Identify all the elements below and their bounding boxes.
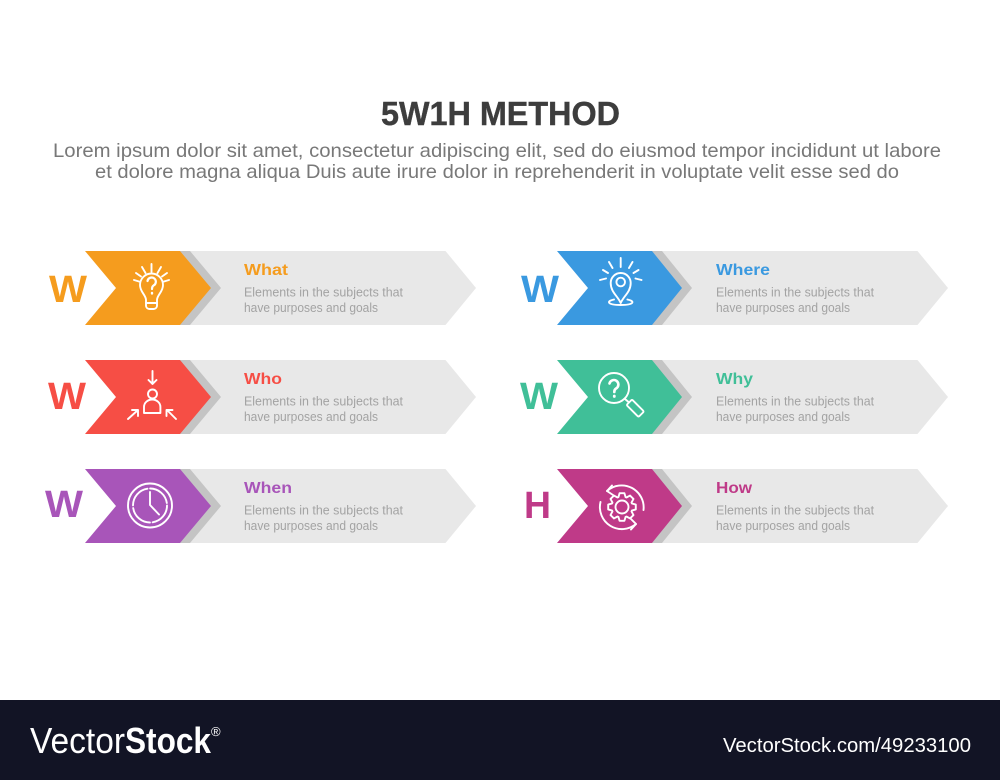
subtitle bbox=[53, 140, 941, 183]
panel: when bbox=[45, 469, 476, 543]
icon: person with arrows bbox=[128, 371, 176, 419]
panel: why: Elements in the subjects that bbox=[716, 394, 874, 408]
panel: who: Elements in the subjects that bbox=[244, 394, 403, 408]
icon: gear with cycle arrows bbox=[600, 485, 644, 530]
panel: why: Why bbox=[716, 371, 753, 388]
panel: where: Elements in the subjects that bbox=[716, 284, 874, 300]
VectorStock logo: Stock bbox=[125, 720, 212, 761]
panel: how: have purposes and goals bbox=[716, 518, 850, 533]
panel: why bbox=[520, 360, 948, 434]
panel: when: When bbox=[244, 480, 292, 497]
icon: clock bbox=[128, 484, 172, 528]
panel: who: W bbox=[48, 376, 86, 418]
panel: what bbox=[49, 251, 476, 325]
panel: what: W bbox=[49, 269, 87, 311]
panel: how: Elements in the subjects that bbox=[716, 502, 874, 518]
VectorStock logo: ® bbox=[211, 724, 221, 739]
panel: where bbox=[521, 251, 948, 325]
icon: location pin bbox=[600, 258, 642, 305]
panel: why: have purposes and goals bbox=[716, 409, 850, 424]
footer banner bbox=[0, 700, 1000, 780]
panel: when: Elements in the subjects that bbox=[244, 502, 403, 518]
subtitle: Lorem ipsum dolor sit amet, consectetur adipiscing elit, sed do eiusmod tempor incididunt ut labore bbox=[53, 140, 941, 162]
panel: who: have purposes and goals bbox=[244, 409, 378, 424]
icon: light bulb bbox=[134, 264, 169, 309]
VectorStock logo: Vector bbox=[30, 720, 125, 761]
VectorStock id: VectorStock.com/49233100 bbox=[723, 735, 971, 757]
title: 5W1H METHOD bbox=[381, 95, 620, 132]
panel: what: have purposes and goals bbox=[244, 300, 378, 315]
panel: how: How bbox=[716, 480, 753, 497]
panel: how bbox=[524, 469, 948, 543]
subtitle: et dolore magna aliqua Duis aute irure dolor in reprehenderit in voluptate velit esse sed do bbox=[95, 161, 899, 183]
panel: who bbox=[48, 360, 476, 434]
panel: what: Elements in the subjects that bbox=[244, 284, 403, 300]
VectorStock logo bbox=[30, 720, 221, 761]
panel: where: Where bbox=[716, 262, 770, 279]
panel: how: H bbox=[524, 485, 551, 527]
panel: when: have purposes and goals bbox=[244, 518, 378, 533]
icon: magnifier with question bbox=[599, 373, 643, 416]
panel: where: have purposes and goals bbox=[716, 300, 850, 315]
panel: when: W bbox=[45, 484, 83, 526]
panel: why: W bbox=[520, 376, 558, 418]
panel: where: W bbox=[521, 269, 559, 311]
panel: what: What bbox=[244, 262, 288, 279]
panel: who: Who bbox=[244, 371, 282, 388]
